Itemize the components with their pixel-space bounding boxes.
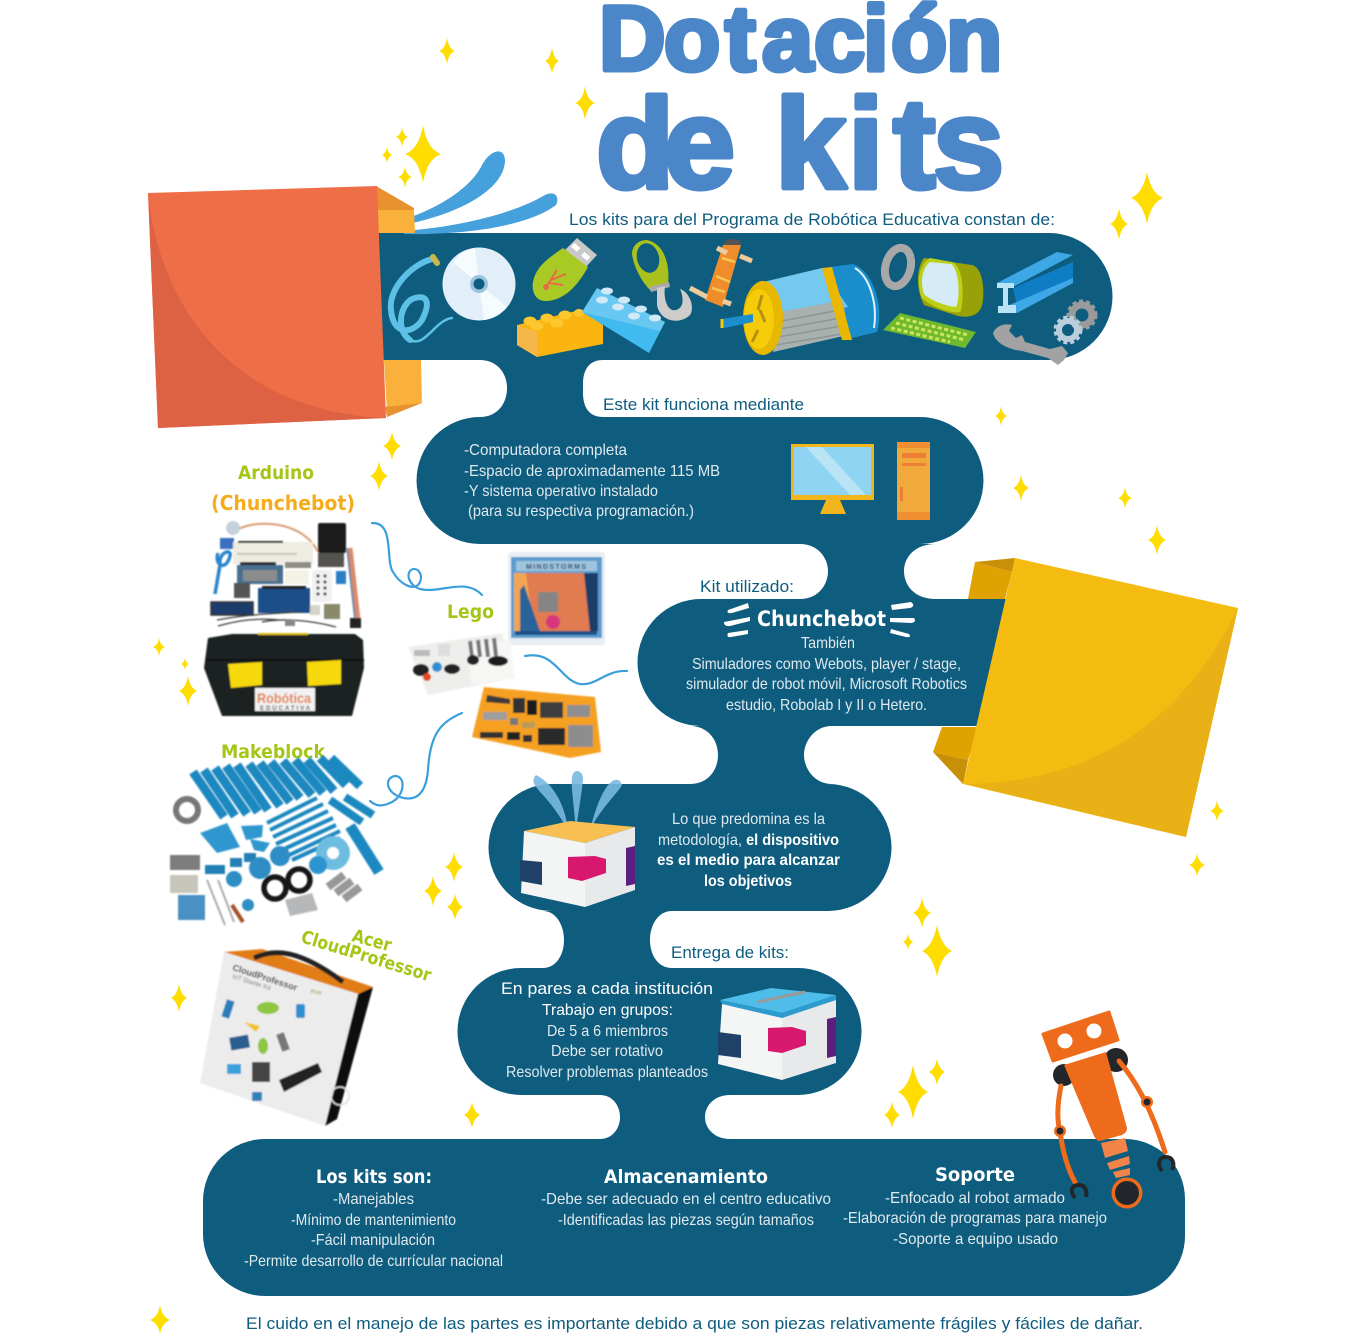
panel text: delivery: En pares a cada institución [501, 979, 713, 998]
panel text: methodology: los objetivos [704, 873, 792, 890]
icon: left burst [724, 603, 750, 637]
icon: open circuit box [520, 771, 635, 907]
icon: gears [1055, 301, 1096, 343]
yellow box [933, 558, 1238, 837]
icon: electric motor [722, 264, 879, 355]
panel text: requirements [464, 442, 720, 520]
icon: monitor [791, 444, 874, 514]
panel text: requirements: -Computadora completa [464, 442, 627, 459]
label: kit used: Kit utilizado: [700, 577, 794, 596]
photo: lego box: MINDSTORMS [526, 564, 586, 571]
icon: USB drive [533, 238, 597, 301]
footer note: El cuido en el manejo de las partes es importante debido a que son piezas relativamente frágiles y fáciles de dañar. [246, 1314, 1143, 1333]
panel text: methodology: es el medio para alcanzar [657, 852, 840, 869]
photo: lego tray [408, 633, 515, 695]
column: kit qualities: -Permite desarrollo de currícular nacional [244, 1253, 503, 1270]
acer cloudprofessor label: Acer [350, 926, 394, 956]
arduino label: (Chunchebot) [211, 491, 355, 515]
icon: hook [632, 240, 692, 321]
panel text: delivery: De 5 a 6 miembros [547, 1023, 668, 1040]
panel: bottom columns [244, 1164, 1107, 1270]
orange box [148, 186, 422, 428]
makeblock label: Makeblock [221, 741, 325, 763]
icon: steel beam [997, 252, 1073, 313]
photo: toolbox: EDUCATIVA [260, 706, 311, 712]
column: kit qualities: Los kits son: [316, 1166, 432, 1188]
column: kit qualities: -Mínimo de mantenimiento [291, 1212, 456, 1229]
panel text: Chunchebot: simulador de robot móvil, Microsoft Robotics [686, 676, 967, 693]
squiggle connectors [370, 523, 627, 805]
icons: components inside kit [391, 238, 1096, 365]
panel text: Chunchebot: También [801, 635, 855, 652]
flowing teal background panels [203, 233, 1185, 1296]
column: storage: -Debe ser adecuado en el centro educativo [541, 1191, 831, 1208]
arduino label: Arduino [238, 462, 314, 484]
icon: CD [442, 248, 516, 320]
column: support [843, 1164, 1107, 1248]
icon: computer tower [897, 442, 930, 520]
column: kit qualities: -Manejables [333, 1191, 414, 1208]
lego label: Lego [447, 601, 494, 623]
intro heading: Los kits para del Programa de Robótica Educativa constan de: [569, 210, 1055, 229]
icon: network cable [391, 257, 452, 341]
icon: green screen [918, 258, 983, 317]
panel text: methodology: metodología, el dispositivo [658, 832, 839, 849]
photo: makeblock parts [170, 758, 379, 925]
panel text: delivery: Resolver problemas planteados [506, 1064, 708, 1081]
panel text: Chunchebot [686, 602, 967, 714]
icon: right burst [890, 602, 915, 637]
panel text: Chunchebot: Chunchebot [757, 607, 886, 631]
photo: lego box [508, 552, 605, 645]
kit operation label: Este kit funciona mediante [603, 395, 804, 414]
photo: toolbox [204, 633, 364, 716]
acer cloudprofessor label: CloudProfessor [299, 927, 434, 986]
column: storage: Almacenamiento [604, 1166, 768, 1188]
column: storage [541, 1166, 831, 1229]
panel text: methodology [657, 811, 840, 890]
panel text: delivery: Trabajo en grupos: [542, 1002, 673, 1019]
icon: blue lego brick [582, 288, 665, 353]
column: support: -Elaboración de programas para manejo [843, 1210, 1107, 1227]
icon: keyboard [883, 313, 976, 348]
label: kit delivery: Entrega de kits: [671, 943, 789, 962]
title: de kits [596, 73, 1004, 216]
icon: metal ring [881, 245, 915, 289]
photo: cloudprofessor box: IoT Starter Kit [231, 973, 272, 992]
column: storage: -Identificadas las piezas según tamaños [558, 1212, 814, 1229]
column: kit qualities [244, 1166, 503, 1270]
icon: yellow lego brick [517, 309, 603, 357]
photo: cloudprofessor box [200, 949, 373, 1126]
icon: wrench [993, 324, 1068, 365]
panel text: requirements: -Espacio de aproximadamente 115 MB [464, 463, 720, 480]
blue swooshes from orange box [380, 151, 557, 234]
panel text: delivery: Debe ser rotativo [551, 1043, 663, 1060]
photo: arduino components [211, 521, 361, 628]
panel text: requirements: (para su respectiva programación.) [468, 503, 694, 520]
photo: cloudprofessor box: CloudProfessor [231, 962, 299, 993]
water jets [533, 771, 622, 830]
column: support: -Enfocado al robot armado [885, 1190, 1065, 1207]
column: support: Soporte [935, 1164, 1015, 1186]
photo: cloudprofessor box: acer [309, 988, 322, 997]
icon: closed circuit box [718, 988, 836, 1080]
panel text: Chunchebot: estudio, Robolab I y II o Hetero. [726, 697, 927, 714]
decorative sparkles [150, 38, 1224, 1334]
photo: orange parts tray [472, 687, 601, 758]
icon: orange sticks [690, 239, 752, 307]
title [596, 0, 1004, 216]
arduino label [211, 462, 355, 515]
panel text: Chunchebot: Simuladores como Webots, player / stage, [692, 656, 961, 673]
photo: toolbox: Robótica [257, 690, 311, 706]
panel text: delivery [501, 979, 713, 1081]
panel text: requirements: -Y sistema operativo instalado [464, 483, 658, 500]
column: support: -Soporte a equipo usado [893, 1231, 1058, 1248]
column: kit qualities: -Fácil manipulación [311, 1232, 435, 1249]
panel text: methodology: Lo que predomina es la [672, 811, 825, 828]
robot [1043, 1012, 1173, 1208]
